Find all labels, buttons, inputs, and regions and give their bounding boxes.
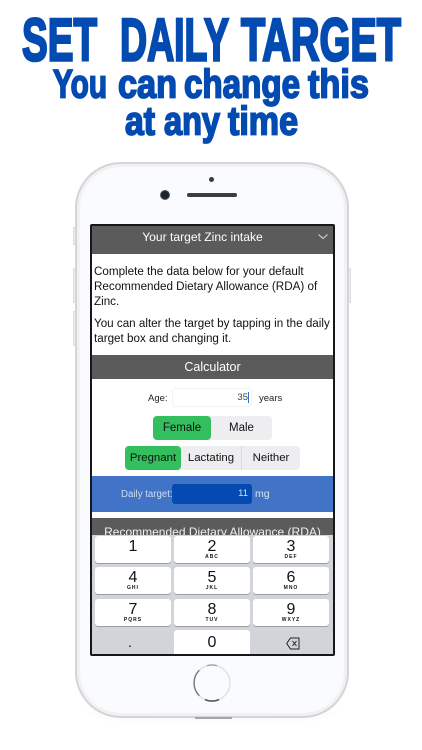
paragraph one: Zinc. [94,295,119,308]
key 1 [95,536,171,563]
age label: Age: [148,393,168,404]
paragraph two [94,317,330,345]
daily target input: 11 [238,488,248,499]
key 6: 6 [287,569,295,586]
heading: set daily target: DAILY [120,6,229,74]
front camera [161,191,169,199]
option: female [153,416,211,440]
unit label: mg [255,488,270,500]
text cursor [248,392,249,403]
key 4: 4 [129,569,137,586]
key 2: 2 [208,538,216,555]
side buttons [73,227,76,245]
proximity sensor [209,177,214,182]
bottom edge notch [195,717,232,719]
years label: years [259,393,282,404]
key 0: 0 [208,634,216,651]
app screen [90,224,335,656]
key 8: TUV [206,617,218,623]
key 6 [253,567,329,594]
key 2 [174,536,250,563]
option: pregnant [125,446,181,470]
RDA header: Recommended Dietary Allowance (RDA) [104,525,321,539]
key 9: WXYZ [282,617,300,623]
calculator header: Calculator [184,360,241,374]
paragraph one: Recommended Dietary Allowance (RDA) of [94,280,317,293]
subheading: you can change this: change [184,62,300,106]
option: pregnant: Pregnant [130,452,176,464]
segmented control: sex [153,416,272,440]
calculator header [92,355,333,379]
key 8: 8 [208,601,216,618]
keyboard [92,535,333,654]
key 9 [253,599,329,626]
intro text [94,265,330,345]
subheading: you can change this: this [308,62,369,106]
heading: set daily target [22,6,401,74]
daily target input [172,484,252,504]
title block [22,6,402,144]
paragraph one [94,265,318,308]
key 4: GHI [127,585,139,591]
key 4 [95,567,171,594]
option: female: Female [163,422,201,434]
key 0 [174,630,250,654]
key 2: ABC [205,554,219,560]
RDA header [92,518,333,542]
subheading: you can change this [53,62,369,106]
paragraph two: You can alter the target by tapping in the daily [94,317,330,330]
heading: set daily target: SET [22,6,97,74]
subheading: you can change this: can [118,62,177,106]
key dot: . [128,634,132,650]
age input [172,388,252,407]
age row [148,388,282,407]
key 3: 3 [287,538,295,555]
key 9: 9 [287,601,295,618]
key 3: DEF [284,554,298,560]
subheading: at any time: any [164,100,221,144]
key 7 [95,599,171,626]
speaker [187,193,237,197]
icon: chevron [318,234,328,239]
key 1: 1 [129,538,137,555]
key 6: MNO [284,585,298,591]
age input: 35 [237,392,248,403]
home button [193,664,230,702]
subheading: at any time [125,100,298,144]
key 5: JKL [206,585,218,591]
key 7: PQRS [124,617,142,623]
phone [73,162,351,719]
phone shadow [90,700,334,714]
header title: Your target Zinc intake [142,230,263,244]
key 7: 7 [129,601,137,618]
key 3 [253,536,329,563]
daily target bar [92,476,333,512]
option: male: Male [229,422,254,434]
option: neither: Neither [253,452,289,464]
option: neither [242,446,300,470]
daily target label: Daily target: [121,489,173,500]
icon: backspace [286,638,300,650]
subheading: at any time: time [228,100,298,144]
phone body [75,162,349,718]
subheading: you can change this: You [53,62,107,106]
key 5 [174,567,250,594]
key 5: 5 [208,569,216,586]
paragraph two: target box and changing it. [94,332,231,345]
option: lactating: Lactating [188,452,234,464]
segmented control: status [125,446,300,470]
paragraph one: Complete the data below for your default [94,265,304,278]
header bar [92,226,333,254]
subheading: at any time: at [125,100,155,144]
key 8 [174,599,250,626]
